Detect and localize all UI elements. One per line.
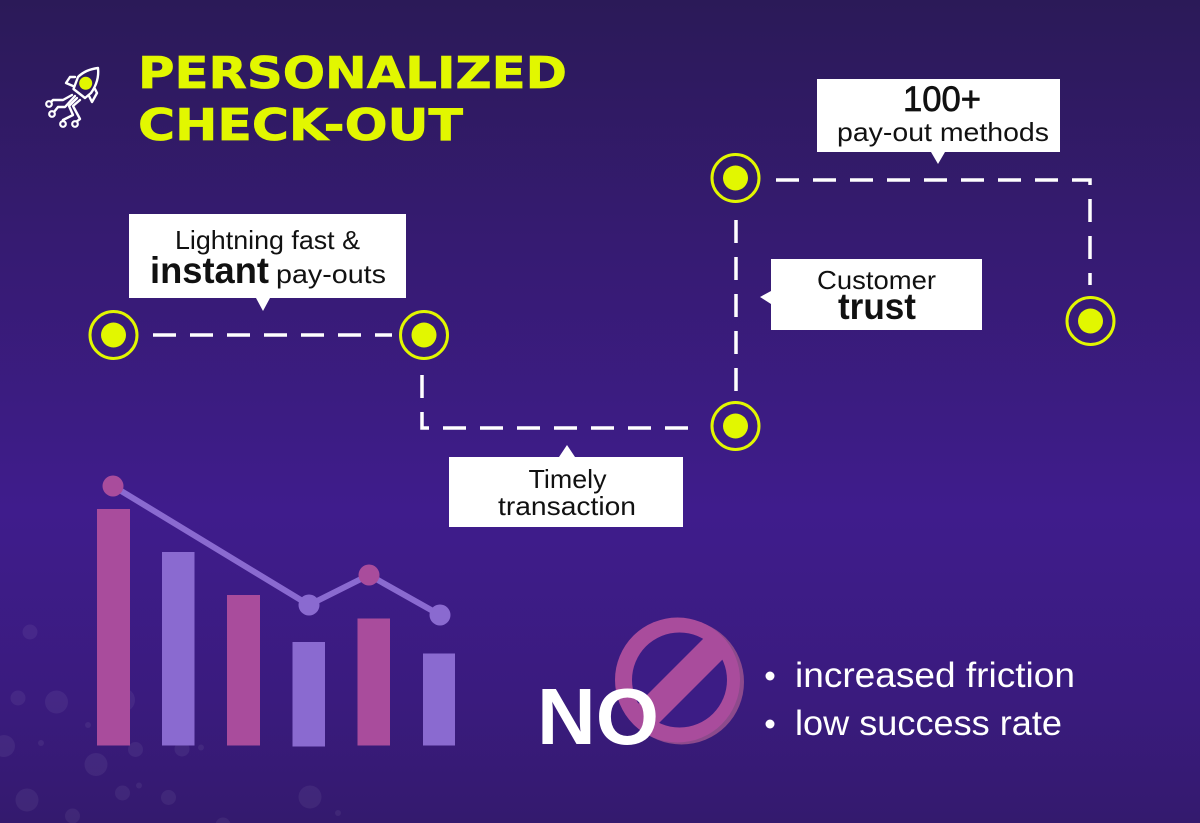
drawbacks list: increased friction (795, 656, 1075, 695)
callout: timely transaction (449, 445, 683, 527)
icon: rocket with circuit trails (46, 68, 98, 127)
callout: timely transaction: transaction (498, 491, 636, 521)
title: PERSONALIZED (138, 48, 567, 99)
bars (97, 509, 455, 746)
route node 5 (1067, 298, 1114, 344)
route node 3 (712, 402, 759, 450)
dashed route (153, 180, 1090, 428)
route node 4 (712, 154, 759, 202)
route node 2 (400, 312, 448, 358)
callout: pay-out methods: 100+ (903, 80, 981, 119)
chart: declining bars and line (97, 476, 455, 746)
callout: lightning fast: instant (150, 250, 269, 291)
callout: customer trust: Customer (817, 265, 936, 295)
callout: pay-out methods (817, 79, 1060, 164)
title (138, 48, 567, 151)
route node 1 (90, 312, 137, 358)
callout: customer trust (760, 259, 982, 330)
callout: lightning fast (129, 214, 406, 311)
drawbacks list (766, 656, 1075, 743)
callout: timely transaction: Timely (528, 464, 606, 494)
icon: prohibition sign (615, 618, 744, 744)
drawbacks list: low success rate (795, 704, 1062, 743)
callout: lightning fast: pay-outs (276, 259, 386, 289)
callout: customer trust: trust (838, 286, 916, 327)
trend points (102, 476, 450, 626)
callout: pay-out methods: pay-out methods (837, 117, 1049, 147)
callout: lightning fast: Lightning fast & (175, 225, 360, 255)
trend line (113, 486, 440, 615)
title: CHECK-OUT (138, 100, 463, 151)
NO label: NO (537, 672, 659, 761)
decorative bubbles (0, 624, 341, 823)
